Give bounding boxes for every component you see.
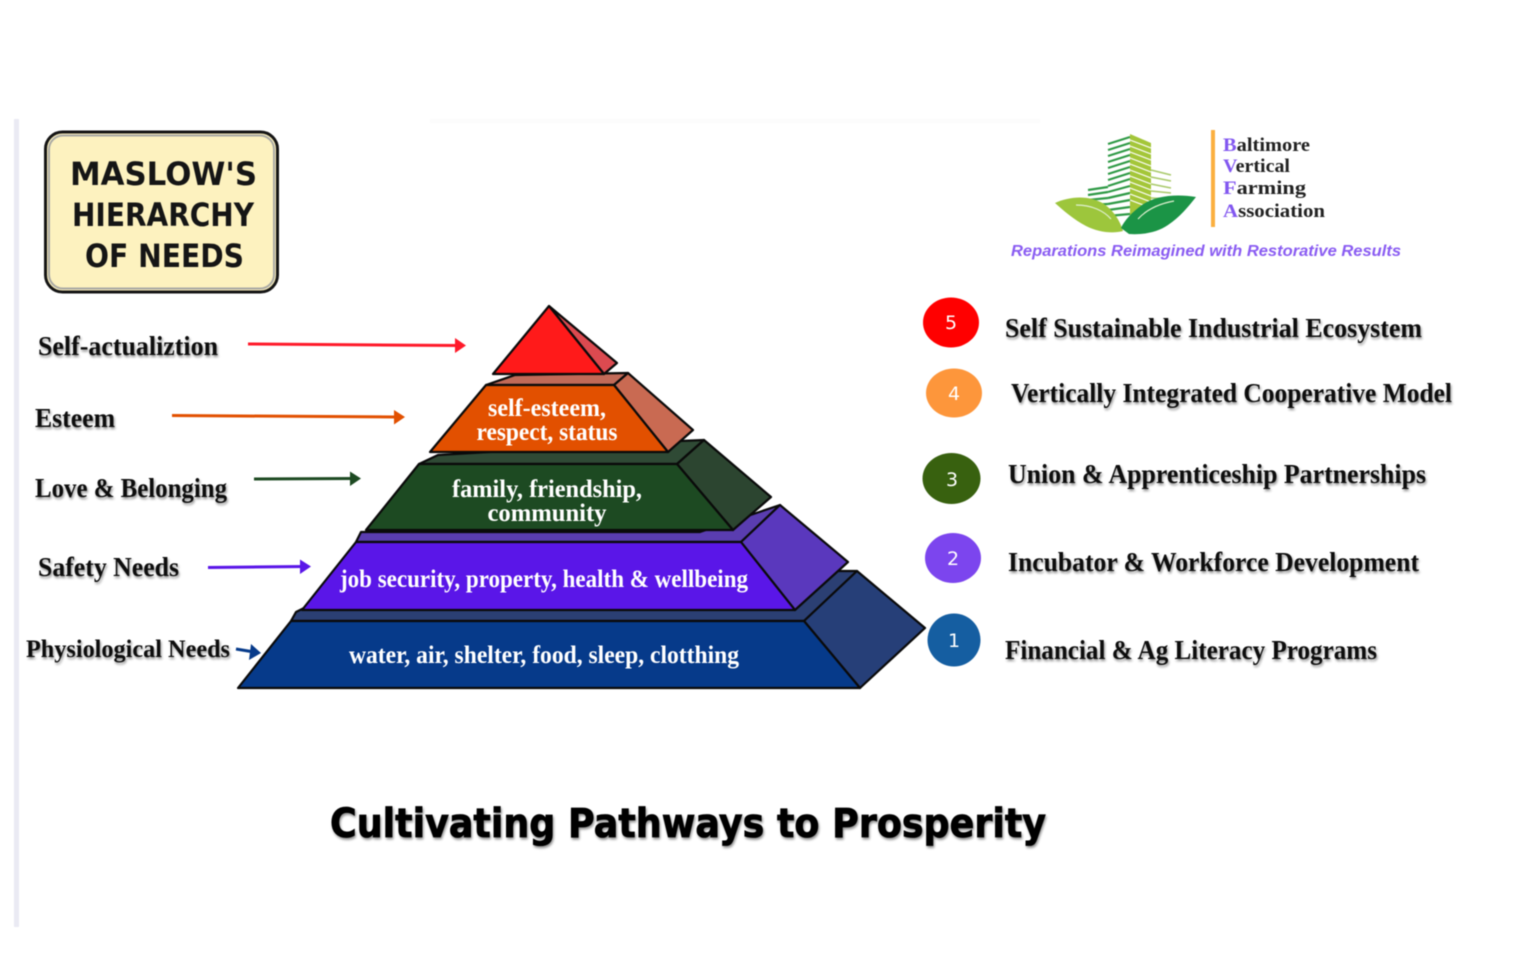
- tier 2: safety: [302, 505, 848, 610]
- tier 3: love and belonging: family, friendship,: [452, 476, 642, 503]
- logo wordmark: Vertical: [1223, 157, 1290, 177]
- item 5: 5: [945, 312, 957, 334]
- logo wordmark: Farming: [1223, 179, 1307, 199]
- icon: green building and leaves: [1055, 134, 1196, 234]
- left labels with arrows: [26, 331, 466, 663]
- badge: Maslow's Hierarchy of Needs: OF NEEDS: [85, 237, 244, 275]
- tier 1: physiological: [238, 571, 925, 688]
- title: Cultivating Pathways to Prosperity: [330, 801, 1046, 847]
- tier 4: esteem: [430, 373, 693, 452]
- item 2: [925, 533, 1419, 583]
- tier 5: self-actualization: [493, 306, 617, 374]
- logo wordmark: Baltimore: [1223, 136, 1310, 156]
- label: Physiological Needs: Physiological Needs: [26, 636, 230, 663]
- tier 3: love and belonging: community: [488, 500, 607, 527]
- tier 2: safety: job security, property, health & wellbeing: [339, 566, 748, 593]
- pyramid: [238, 306, 925, 688]
- item 4: Vertically Integrated Cooperative Model: [1011, 378, 1452, 408]
- tier 4: esteem: respect, status: [476, 419, 618, 446]
- item 3: 3: [946, 469, 958, 491]
- item 2: 2: [947, 548, 959, 570]
- badge: Maslow's Hierarchy of Needs: MASLOW'S: [70, 155, 257, 193]
- label: Love and Belonging: Love & Belonging: [35, 473, 227, 503]
- label: Safety Needs: Safety Needs: [38, 552, 179, 582]
- divider bar: [1211, 130, 1215, 227]
- badge: Maslow's Hierarchy of Needs: [46, 132, 278, 292]
- tier 3: love and belonging: [366, 440, 771, 530]
- label: Esteem: [35, 403, 405, 433]
- label: Esteem: Esteem: [35, 403, 115, 433]
- right numbered list: [922, 298, 1452, 666]
- label: Self-actualization: Self-actualiztion: [38, 331, 218, 361]
- item 4: 4: [948, 383, 960, 405]
- item 1: [928, 614, 1377, 666]
- label: Self-actualization: [38, 331, 466, 361]
- label: Safety Needs: [38, 552, 311, 582]
- tier 4: esteem: self-esteem,: [488, 395, 606, 422]
- tier 1: physiological: water, air, shelter, food, sleep, clotthing: [349, 642, 739, 669]
- label: Love and Belonging: [35, 472, 361, 503]
- logo wordmark: Association: [1223, 202, 1326, 222]
- item 5: Self Sustainable Industrial Ecosystem: [1005, 313, 1422, 343]
- item 4: [926, 368, 1452, 418]
- item 3: [922, 453, 1426, 504]
- item 1: 1: [948, 630, 960, 652]
- badge: Maslow's Hierarchy of Needs: HIERARCHY: [72, 196, 255, 234]
- logo: Baltimore Vertical Farming Association: [1011, 130, 1401, 260]
- item 3: Union & Apprenticeship Partnerships: [1008, 459, 1426, 489]
- item 5: [923, 298, 1422, 348]
- item 1: Financial & Ag Literacy Programs: [1005, 635, 1377, 665]
- logo wordmark: [1223, 136, 1326, 222]
- tagline: Reparations Reimagined with Restorative Results: [1011, 243, 1401, 260]
- item 2: Incubator & Workforce Development: [1008, 547, 1419, 577]
